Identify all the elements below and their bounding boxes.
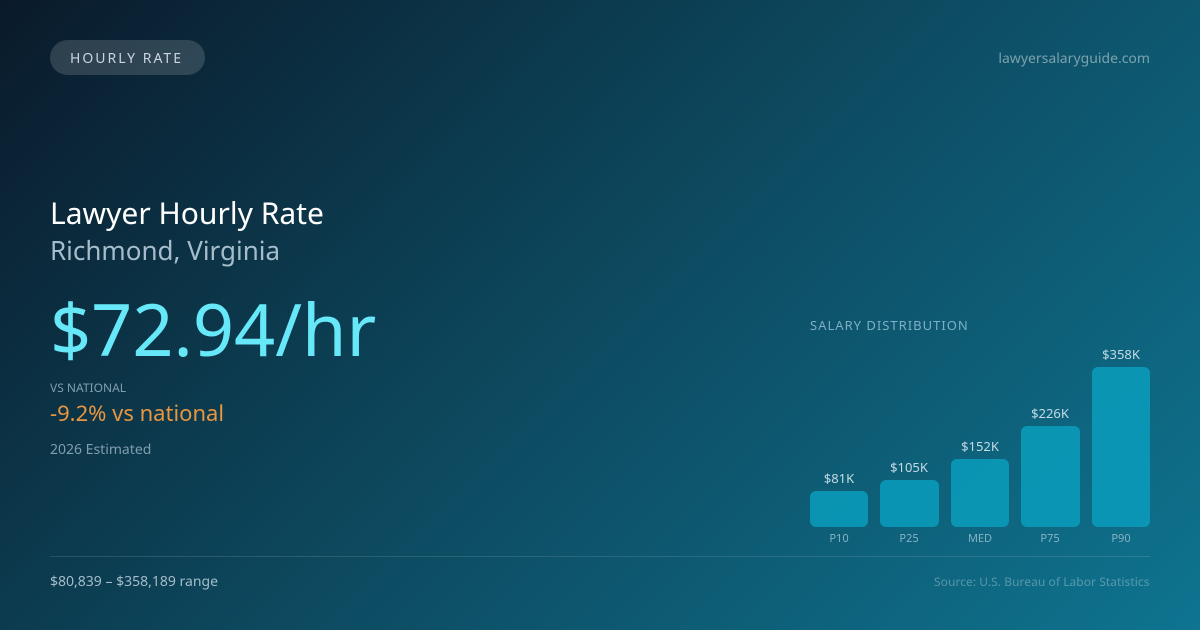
subtitle: location: Richmond, Virginia xyxy=(50,232,280,268)
comparison label: VS NATIONAL xyxy=(50,379,126,396)
value P10: $81K xyxy=(824,469,854,487)
value P75: $226K xyxy=(1031,404,1069,422)
value MED: $152K xyxy=(961,437,999,455)
label P10: P10 xyxy=(829,531,849,546)
label P75: P75 xyxy=(1040,531,1060,546)
badge: hourly rate xyxy=(50,40,205,75)
label MED: MED xyxy=(968,531,992,546)
bar P25 xyxy=(880,480,939,527)
bar MED xyxy=(951,459,1009,527)
estimate note: 2026 Estimated xyxy=(50,440,151,459)
footer divider xyxy=(50,556,1150,557)
comparison value: -9.2% vs national xyxy=(50,398,224,428)
source: Source: U.S. Bureau of Labor Statistics xyxy=(934,573,1150,590)
badge label: HOURLY RATE xyxy=(70,49,183,68)
bar P90 xyxy=(1092,367,1150,527)
title: Lawyer Hourly Rate xyxy=(50,192,324,233)
label P90: P90 xyxy=(1111,531,1131,546)
site name: lawyersalaryguide.com xyxy=(998,49,1150,68)
label P25: P25 xyxy=(899,531,919,546)
headline hourly rate: $72.94/hr xyxy=(50,280,376,378)
bar P75 xyxy=(1021,426,1080,527)
value P25: $105K xyxy=(890,458,928,476)
bar P10 xyxy=(810,491,868,527)
value P90: $358K xyxy=(1102,345,1140,363)
chart heading: SALARY DISTRIBUTION xyxy=(810,316,969,334)
salary range: $80,839 – $358,189 range xyxy=(50,572,218,591)
